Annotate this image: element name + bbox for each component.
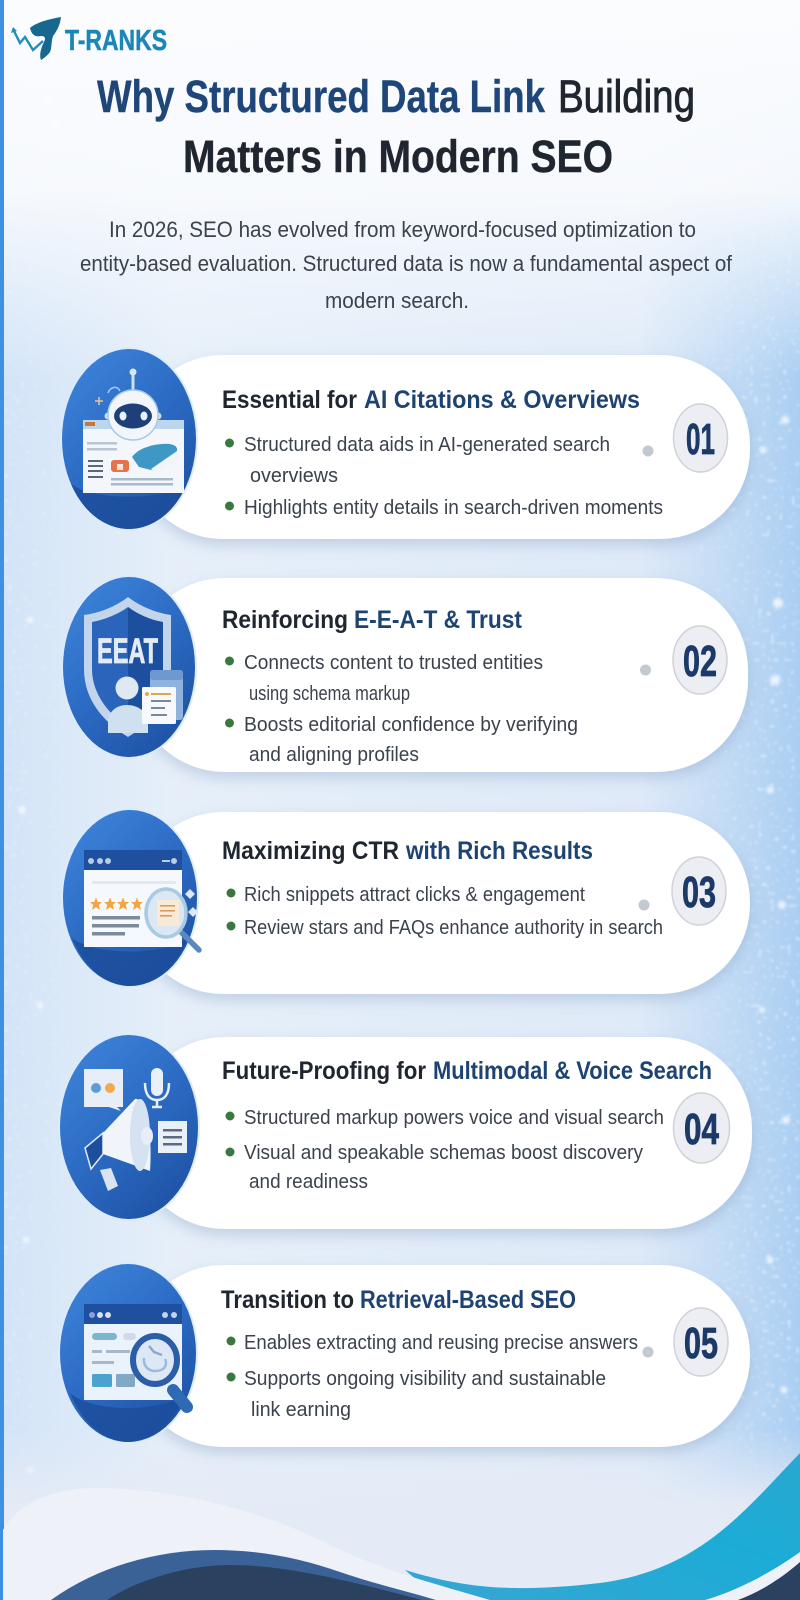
card 1 heading: Essential for [222, 386, 357, 414]
card 2 heading: E-E-A-T & Trust [354, 606, 523, 634]
panel: card 2 E-E-A-T [61, 575, 748, 772]
title: Why Structured Data Link [97, 71, 546, 122]
card 1 heading: AI Citations & Overviews [364, 386, 640, 414]
card 5 bullets: Supports ongoing visibility and sustainable [244, 1367, 606, 1390]
number badge 01 [642, 404, 728, 472]
card 4 heading: Multimodal & Voice Search [433, 1057, 712, 1085]
card 4 heading [222, 1057, 712, 1085]
card 2 bullets: and aligning profiles [249, 743, 419, 766]
number badge 04: 04 [684, 1105, 719, 1154]
icon: search window with magnifier [58, 1262, 198, 1444]
card 4 bullets: Structured markup powers voice and visual search [244, 1106, 664, 1129]
card 4 heading: Future-Proofing for [222, 1057, 426, 1085]
number badge 01: 01 [686, 415, 715, 464]
title: Building [558, 71, 695, 122]
number badge 03: 03 [682, 868, 716, 917]
card 5 bullets: Enables extracting and reusing precise answers [244, 1331, 638, 1354]
panel: card 1 AI citations [60, 347, 750, 539]
card 2 bullets [225, 651, 578, 766]
number badge 04 [674, 1093, 730, 1163]
logo: T-RANKS [11, 17, 167, 60]
card 1 heading [222, 386, 640, 414]
card 1 bullets [225, 433, 663, 519]
card 3 heading: Maximizing CTR [222, 837, 399, 865]
panel: card 4 voice search [58, 1033, 752, 1229]
icon: EEAT shield with person: EEAT [97, 632, 158, 671]
card 4 bullets: and readiness [249, 1170, 368, 1193]
icon: rich results window with stars [61, 808, 199, 988]
number badge 05 [642, 1308, 728, 1376]
intro paragraph [80, 217, 733, 313]
card 3 bullets [226, 883, 663, 939]
card 3 heading: with Rich Results [405, 837, 593, 865]
card 2 heading: Reinforcing [222, 606, 348, 634]
card 1 bullets: overviews [250, 464, 338, 487]
card 4 bullets: Visual and speakable schemas boost discovery [244, 1141, 644, 1164]
card 2 heading [222, 606, 523, 634]
number badge 05: 05 [684, 1319, 718, 1368]
card 5 heading [221, 1286, 576, 1314]
card 5 heading: Retrieval-Based SEO [360, 1286, 576, 1314]
number badge 02 [640, 626, 727, 694]
intro paragraph: In 2026, SEO has evolved from keyword-focused optimization to [109, 217, 696, 242]
title: Matters in Modern SEO [183, 131, 613, 182]
card 3 heading [222, 837, 593, 865]
icon: megaphone with microphone [58, 1033, 200, 1221]
icon: robot over browser window [60, 347, 198, 531]
number badge 03 [638, 857, 726, 925]
intro paragraph: entity-based evaluation. Structured data is now a fundamental aspect of [80, 251, 733, 276]
card 5 bullets [226, 1331, 638, 1421]
card 3 bullets: Rich snippets attract clicks & engagement [244, 883, 585, 906]
icon: EEAT shield with person [61, 575, 197, 759]
card 1 bullets: Structured data aids in AI-generated search [244, 433, 610, 456]
intro paragraph: modern search. [325, 288, 469, 313]
panel: card 3 CTR [61, 808, 750, 994]
card 4 bullets [226, 1106, 664, 1193]
bottom wave decoration [3, 1453, 800, 1600]
number badge 02: 02 [683, 637, 717, 686]
card 2 bullets: Connects content to trusted entities [244, 651, 543, 674]
panel: card 5 retrieval [58, 1262, 750, 1447]
card 5 bullets: link earning [251, 1398, 351, 1421]
card 5 heading: Transition to [221, 1286, 354, 1314]
title [97, 71, 695, 182]
card 2 bullets: using schema markup [249, 682, 410, 705]
card 3 bullets: Review stars and FAQs enhance authority in search [244, 916, 663, 939]
card 1 bullets: Highlights entity details in search-driven moments [244, 496, 663, 519]
logo: T-RANKS: T-RANKS [65, 25, 167, 57]
card 2 bullets: Boosts editorial confidence by verifying [244, 713, 578, 736]
